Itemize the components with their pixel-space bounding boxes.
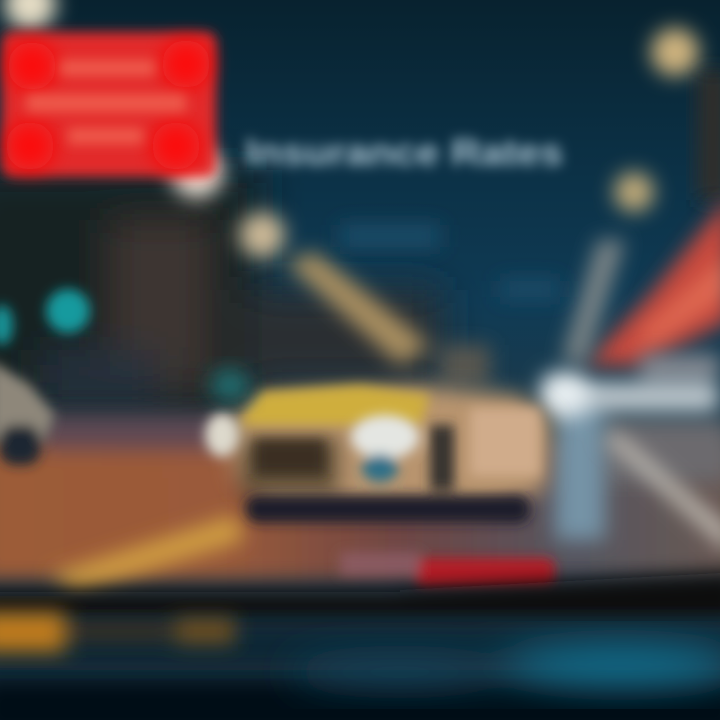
road surface bbox=[0, 415, 720, 580]
heading: blurred title text: Insurance Rates bbox=[245, 132, 563, 173]
sign blurred text bbox=[26, 60, 186, 144]
teal highlight by taxi bbox=[210, 369, 250, 401]
red sign bbox=[2, 32, 216, 177]
white glare and road streak bbox=[540, 355, 720, 552]
background: dark buildings on the left bbox=[0, 170, 440, 420]
left car bbox=[0, 360, 55, 465]
crane arm bbox=[285, 252, 490, 385]
taxi body bbox=[225, 385, 552, 510]
foreground lower panel bbox=[0, 622, 720, 720]
teal reflections bbox=[290, 643, 720, 687]
red streak on the right bbox=[585, 195, 720, 365]
orange reflections bbox=[0, 612, 235, 652]
taxi bbox=[205, 369, 552, 523]
sign corner dots bbox=[6, 40, 210, 170]
street lights bbox=[4, 0, 699, 258]
taxi yellow roof bbox=[238, 385, 430, 425]
yellow road stripe bbox=[50, 515, 245, 592]
taxi details bbox=[205, 408, 540, 523]
red stripe on road bbox=[340, 552, 555, 588]
pale pole on the right bbox=[555, 240, 625, 540]
foreground dark band bbox=[0, 572, 720, 622]
sub text faint bbox=[340, 225, 560, 298]
top-right dark post bbox=[698, 70, 720, 200]
teal traffic lights bbox=[0, 289, 90, 345]
